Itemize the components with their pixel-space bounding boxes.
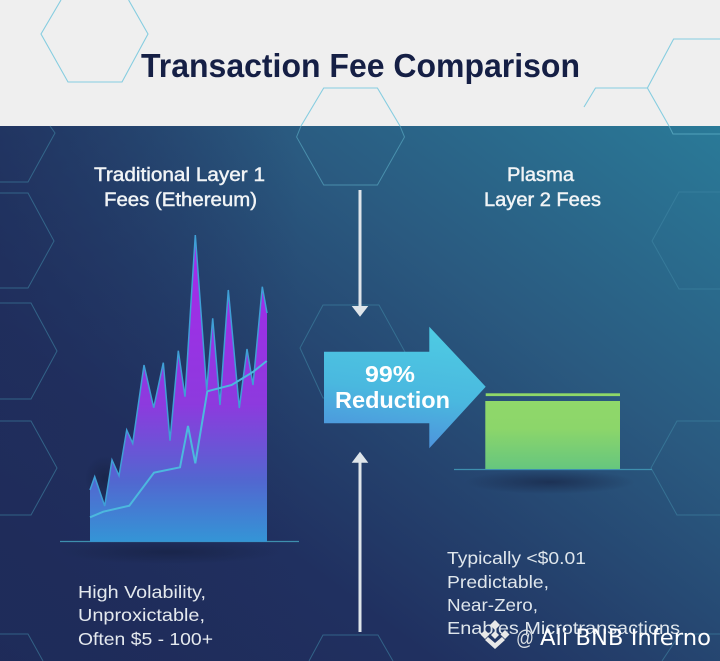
volatile fee area — [90, 235, 267, 542]
arrow: pointing up — [352, 452, 368, 632]
text block: layer 1 description — [78, 582, 213, 649]
bar chart: layer 2 fees — [454, 393, 652, 494]
text block: layer 2 description: Typically <$0.01 — [447, 548, 586, 568]
heading: plasma layer 2 fees: Plasma — [507, 165, 574, 186]
dark panel left shading — [0, 126, 300, 661]
area chart: layer 1 fees — [60, 235, 299, 564]
text block: layer 2 description: Predictable, — [447, 572, 549, 592]
heading: traditional layer 1 fees: Fees (Ethereum) — [104, 190, 257, 211]
text block: layer 1 description: Often $5 - 100+ — [78, 629, 213, 649]
arrow: pointing down — [352, 190, 368, 317]
chart shadow — [60, 540, 280, 564]
watermark: Ali BNB Inferno — [540, 626, 711, 651]
watermark — [480, 620, 711, 651]
arrow: 99% reduction: Reduction — [335, 387, 450, 413]
bar baseline — [454, 468, 652, 470]
heading: plasma layer 2 fees — [484, 165, 601, 211]
trend line — [90, 361, 267, 517]
header band — [0, 0, 720, 126]
text block: layer 2 description: Near-Zero, — [447, 595, 538, 615]
text block: layer 2 description — [447, 548, 680, 638]
heading: traditional layer 1 fees — [94, 165, 265, 211]
fee cap strip — [486, 393, 620, 396]
text block: layer 1 description: Unproxictable, — [78, 605, 205, 625]
heading: plasma layer 2 fees: Layer 2 Fees — [484, 190, 601, 211]
arrow: 99% reduction — [324, 327, 486, 448]
header hexagon outlines — [41, 0, 720, 126]
text block: layer 2 description: Enables Microtransactions — [447, 618, 680, 638]
chart baseline — [60, 540, 299, 542]
bar shadow — [465, 470, 635, 494]
icon: binance diamonds — [480, 620, 510, 649]
fee bar — [485, 401, 620, 469]
watermark: @ — [516, 627, 534, 650]
title: Transaction Fee Comparison — [141, 47, 580, 84]
arrow: 99% reduction: 99% — [365, 361, 415, 387]
text block: layer 1 description: High Volability, — [78, 582, 206, 602]
heading: traditional layer 1 fees: Traditional Layer 1 — [94, 165, 265, 186]
